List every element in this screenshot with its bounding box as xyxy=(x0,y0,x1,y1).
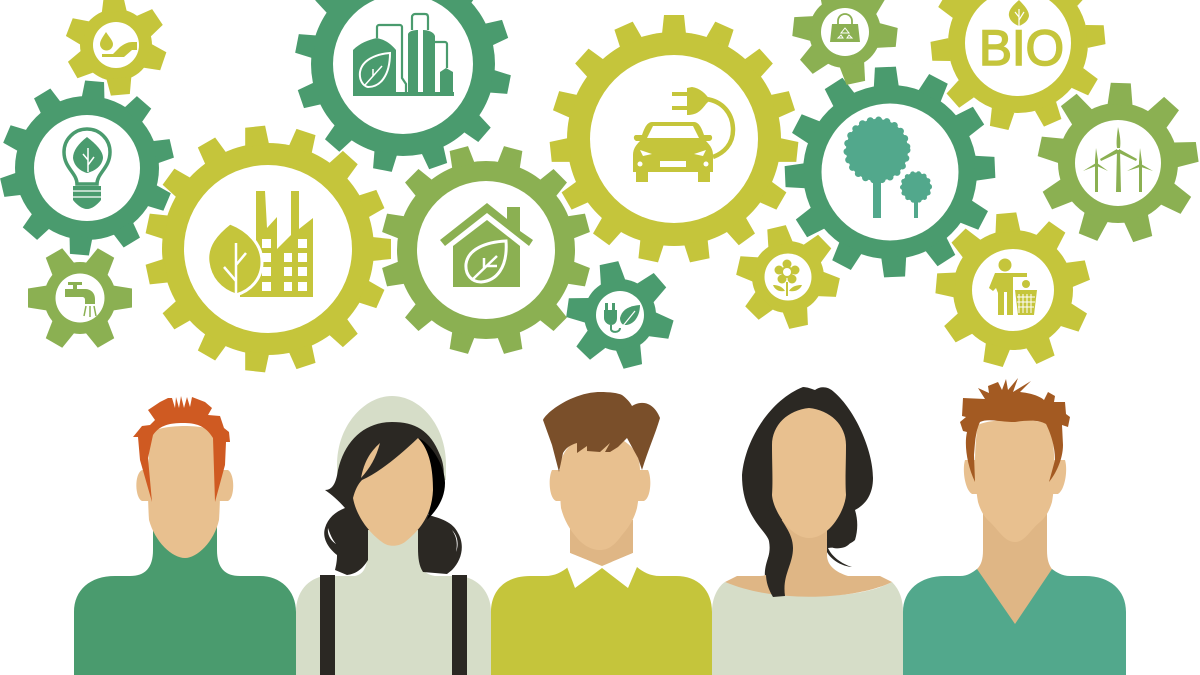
icon: person using bin xyxy=(989,258,1037,315)
icon: leaf above BIO xyxy=(1009,0,1029,26)
ears xyxy=(550,470,650,501)
people row xyxy=(74,378,1126,675)
icon: three wind turbines xyxy=(1083,127,1153,192)
skin slit in fringe xyxy=(361,443,380,478)
person: spiky-haired man in teal xyxy=(903,378,1126,675)
icon: tap with water xyxy=(65,282,96,317)
brown hair xyxy=(543,392,660,472)
curl xyxy=(827,500,856,548)
icon: water drop over hand xyxy=(100,32,137,57)
pale shirt xyxy=(296,510,491,675)
gear: flower xyxy=(735,224,840,329)
orange-brown spiky hair xyxy=(960,378,1070,482)
neck and V collar xyxy=(977,510,1052,624)
icon: two trees xyxy=(846,119,930,218)
gear: electric car xyxy=(549,15,799,263)
icon: bulb with leaf xyxy=(64,129,110,209)
gear: leaf and plug xyxy=(566,261,674,369)
gear: water and hand xyxy=(65,0,167,96)
pale top xyxy=(712,582,903,675)
gear: water tap xyxy=(28,247,132,349)
ears xyxy=(136,470,233,501)
hat xyxy=(337,396,446,480)
gear: wind turbines xyxy=(1037,83,1199,243)
gear: refinery xyxy=(295,0,511,172)
face xyxy=(560,435,640,550)
icon: flower xyxy=(773,260,802,296)
gear cluster xyxy=(0,0,1199,373)
white collar xyxy=(567,553,637,588)
gear: eco house xyxy=(382,146,590,354)
icon: refinery with leaf xyxy=(353,14,454,96)
gear: recycling bag xyxy=(792,0,898,85)
person: red-haired man in green xyxy=(74,396,296,675)
yellow sweater xyxy=(491,560,712,675)
person: brown-haired man in yellow sweater xyxy=(491,392,712,675)
person: woman with hat and suspenders xyxy=(296,396,491,675)
ears xyxy=(964,460,1066,494)
gear: factory and leaf xyxy=(145,125,391,373)
gear: BIO xyxy=(930,0,1106,130)
face xyxy=(353,438,433,546)
back hair xyxy=(742,387,873,597)
label: BIO: BIO xyxy=(979,20,1064,76)
teal shirt xyxy=(903,569,1126,675)
green turtleneck xyxy=(74,525,296,675)
gear: light bulb xyxy=(0,80,174,256)
face xyxy=(772,408,846,538)
face xyxy=(975,420,1054,542)
icon: bag xyxy=(830,14,860,42)
front hair lock xyxy=(763,500,793,597)
gear: recycling person xyxy=(935,212,1091,368)
neck xyxy=(570,520,633,566)
icon: car and charging plug xyxy=(633,87,733,182)
icon: leaf xyxy=(208,223,262,298)
red hair xyxy=(133,396,230,502)
black hair strand xyxy=(418,438,445,520)
curl highlights xyxy=(328,528,458,552)
chest and neck xyxy=(725,520,892,597)
icon: house with leaf xyxy=(440,203,533,287)
gear: trees xyxy=(785,67,995,277)
face xyxy=(148,426,220,558)
icon: plug and leaf xyxy=(604,303,640,332)
suspenders xyxy=(320,575,467,675)
dark hair xyxy=(324,422,462,575)
person: long-haired woman xyxy=(712,387,903,675)
icon: factory xyxy=(240,191,313,297)
